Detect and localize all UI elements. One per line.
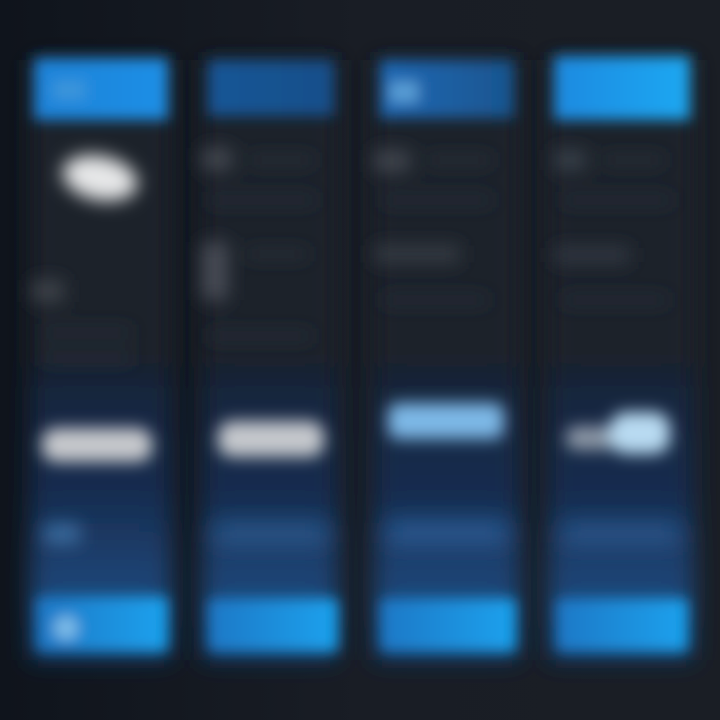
- column 4 feature text: [554, 150, 672, 304]
- panel: column 2: [202, 60, 338, 660]
- column 1 white title: [58, 149, 142, 207]
- column 4 header: [554, 56, 690, 120]
- column 4 button: [556, 598, 688, 652]
- column 2 button: [208, 598, 338, 652]
- column 3 feature text: [374, 150, 492, 304]
- column 4 body: [548, 60, 694, 660]
- column 4 detail text: [562, 524, 680, 544]
- panel: column 1: [30, 58, 172, 660]
- column 2 detail text: [214, 524, 328, 544]
- column 3 detail text: [387, 522, 508, 544]
- panel: column 4: [548, 56, 694, 660]
- column 1 button: [36, 596, 168, 652]
- panel: column 3: [374, 60, 520, 660]
- column 1 header: [34, 58, 168, 120]
- column 1 body: [30, 60, 172, 660]
- column 3 header: [380, 60, 514, 118]
- column 2 feature text: [202, 148, 316, 340]
- column 2 header: [208, 60, 334, 116]
- column 1 feature text: [32, 280, 132, 362]
- column 2 body: [202, 60, 338, 660]
- column 2 price: [218, 421, 324, 457]
- column 3 body: [374, 60, 520, 660]
- column 3 button: [380, 598, 516, 652]
- column 4 price: [566, 412, 670, 454]
- column 1 detail text: [44, 524, 80, 544]
- column 3 price: [388, 403, 504, 439]
- column 1 price: [42, 428, 152, 462]
